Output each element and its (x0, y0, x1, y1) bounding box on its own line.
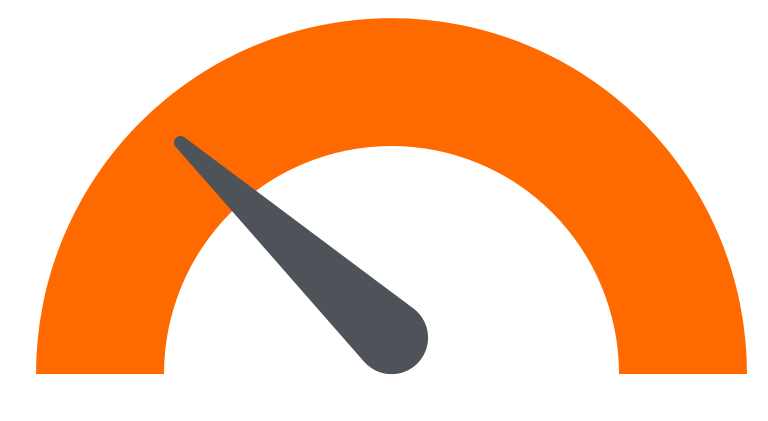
gauge arc (36, 18, 747, 374)
gauge needle (174, 136, 428, 374)
